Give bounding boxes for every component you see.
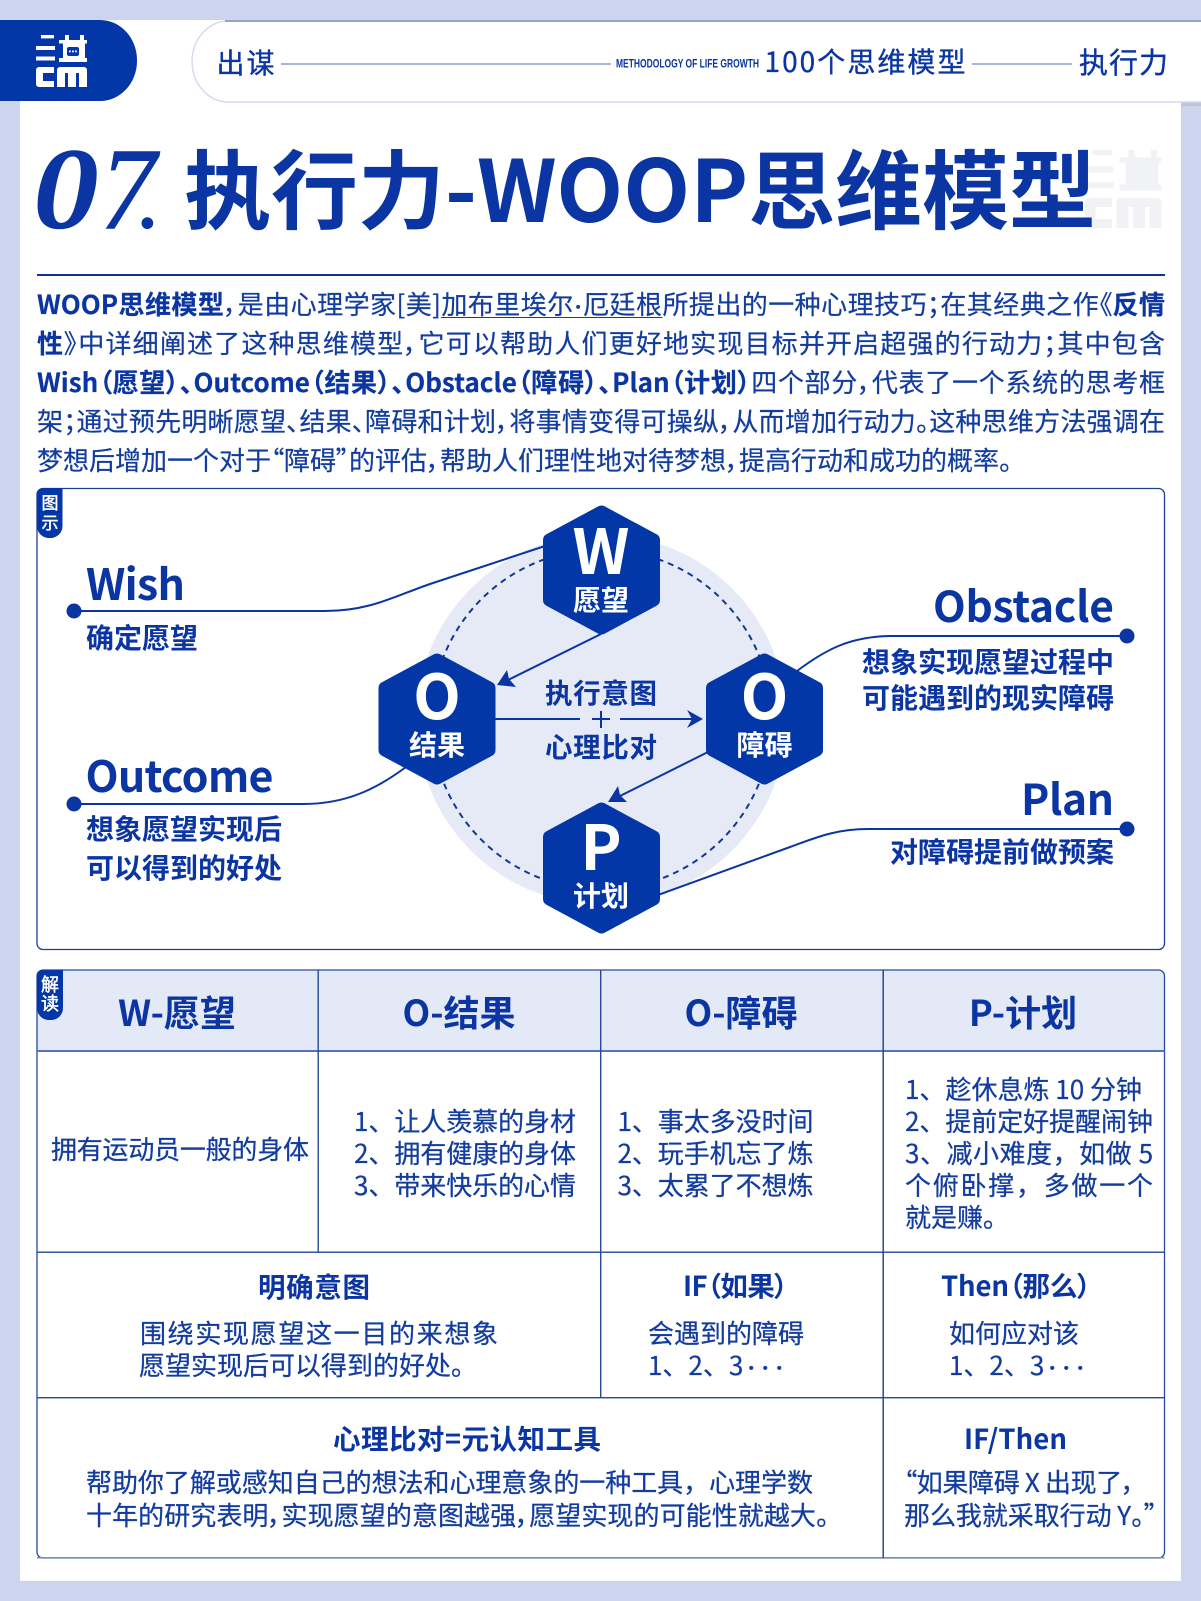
header pill [192,20,1201,106]
hexagon: W: 愿望 [573,579,629,619]
table header: P-计划 [969,985,1077,1037]
category label: 执行力 [1079,40,1168,82]
table header: O-结果 [402,985,516,1037]
intro paragraph: WOOP思维模型，是由心理学家[美]加布里埃尔·厄廷根所提出的一种心理技巧；在其经典之作《反情 [37,285,1165,322]
label: obstacle: 可能遇到的现实障碍 [862,677,1114,717]
series name: 100个思维模型 [764,41,966,81]
hexagon: O obstacle: 障碍 [736,724,793,764]
title text: 执行力-WOOP思维模型 [184,122,1096,247]
tag: diagram: 示 [42,509,58,534]
title number [33,125,160,254]
tag: interpretation [37,970,63,1020]
cell: mental contrasting: 心理比对=元认知工具 [333,1417,601,1457]
cell: clear intention: 围绕实现愿望这一目的来想象 [140,1314,498,1351]
tag: diagram: 图 [42,489,58,514]
cell: plan list [905,1070,1153,1235]
cell: outcome list: 1、让人羡慕的身材 [354,1102,576,1139]
cell: if [648,1264,804,1383]
hexagon: W: W [573,502,629,592]
title [33,122,1096,254]
tag: diagram [37,488,63,538]
cell: if then: 那么我就采取行动 Y。” [904,1496,1157,1533]
label: plan: 对障碍提前做预案 [890,831,1114,871]
hexagon: O obstacle [712,647,816,778]
cell: then: 如何应对该 [949,1314,1079,1351]
cell: outcome list [354,1102,576,1203]
cell: if then: IF/Then [964,1417,1067,1457]
cell: if: IF（如果） [683,1264,788,1304]
label: outcome: 想象愿望实现后 [86,808,282,848]
cell: if: 1、2、3··· [648,1346,784,1383]
centre label: implementation intention: 执行意图 [545,671,657,711]
cell: if: 会遇到的障碍 [648,1314,804,1351]
label: obstacle: Obstacle [933,574,1114,635]
cell: wish content: 拥有运动员一般的身体 [51,1130,309,1167]
intro paragraph: Wish（愿望）、Outcome（结果）、Obstacle（障碍）、Plan（计划）四个部分，代表了一个系统的思考框 [37,363,1165,400]
cell: then: 1、2、3··· [949,1346,1085,1383]
cell: obstacle list: 2、玩手机忘了炼 [618,1134,814,1171]
cell: mental contrasting [86,1417,829,1533]
cell: outcome list: 3、带来快乐的心情 [354,1166,576,1203]
label: wish [86,551,198,657]
cell: if then: “如果障碍 X 出现了， [904,1463,1135,1500]
cell: then [941,1264,1091,1383]
cell: clear intention [139,1265,498,1383]
connector: wish [66,546,545,618]
header bar [0,20,1201,106]
hexagon: O outcome: 结果 [409,724,465,764]
hexagon: W [550,502,654,628]
background circle [416,534,786,904]
intro paragraph: 架；通过预先明晰愿望、结果、障碍和计划，将事情变得可操纵，从而增加行动力。这种思维方法强调在 [37,402,1165,439]
label: plan [890,767,1114,871]
arrow: wish to outcome [497,634,601,687]
title number: 7 [100,125,160,254]
logo badge [0,20,137,101]
hexagon: P: 计划 [573,875,629,915]
tag: interpretation: 解 [41,971,59,997]
title number: . [141,164,159,244]
plus sign [592,711,610,728]
arrow: obstacle to plan [608,752,708,802]
hexagon: O obstacle: O [741,647,788,737]
cell: mental contrasting: 帮助你了解或感知自己的想法和心理意象的一种工具，心理学数 [86,1463,813,1500]
hexagon: O outcome [385,647,489,778]
cell: plan list: 1、趁休息炼 10 分钟 [905,1070,1142,1107]
title number: 0 [33,125,99,254]
label: outcome [86,743,282,887]
hexagon: P: P [580,798,622,888]
connector: outcome [66,767,406,812]
centre label: mental contrasting: 心理比对 [545,725,657,765]
intro paragraph: 性》中详细阐述了这种思维模型，它可以帮助人们更好地实现目标并开启超强的行动力；其中包含 [37,324,1165,361]
cell: obstacle list [618,1102,814,1203]
connector: obstacle [797,628,1134,671]
panel: diagram [37,488,1165,950]
label: wish: 确定愿望 [86,617,198,657]
table header [118,985,1077,1037]
cell: obstacle list: 1、事太多没时间 [618,1102,814,1139]
cell: plan list: 2、提前定好提醒闹钟 [905,1102,1153,1139]
cell: plan list: 个俯卧撑，多做一个 [905,1166,1153,1203]
table header: W-愿望 [118,985,236,1037]
label: obstacle: 想象实现愿望过程中 [862,641,1114,681]
cell: clear intention: 愿望实现后可以得到的好处。 [139,1346,477,1383]
label: outcome: 可以得到的好处 [86,847,282,887]
cell: then: Then（那么） [941,1264,1091,1304]
cell: mental contrasting: 十年的研究表明，实现愿望的意图越强，愿望实现的可能性就越大。 [86,1496,829,1533]
label: outcome: Outcome [86,743,274,805]
cell: plan list: 就是赚。 [905,1198,1009,1235]
panel: interpretation table [37,970,1165,1558]
series label left: 出谋 [216,42,274,82]
intro paragraph: 梦想后增加一个对于“障碍”的评估，帮助人们理性地对待梦想，提高行动和成功的概率。 [37,441,1012,478]
arrow: outcome to obstacle [495,710,703,728]
cell: plan list: 3、减小难度，如做 5 [905,1134,1153,1171]
table header: O-障碍 [684,985,798,1037]
label: wish: Wish [86,551,185,613]
label: obstacle [862,574,1114,717]
watermark logo [1085,150,1162,228]
cell: obstacle list: 3、太累了不想炼 [618,1166,814,1203]
methodology caption: METHODOLOGY OF LIFE GROWTH [616,56,759,70]
intro paragraph [37,285,1165,478]
cell: if then [904,1417,1157,1533]
hexagon: O outcome: O [413,647,461,737]
connector: plan [658,822,1134,895]
cell: clear intention: 明确意图 [258,1265,370,1305]
cell: outcome list: 2、拥有健康的身体 [354,1134,576,1171]
label: plan: Plan [1021,767,1114,828]
hexagon: P [550,798,654,927]
tag: interpretation: 读 [41,990,59,1016]
